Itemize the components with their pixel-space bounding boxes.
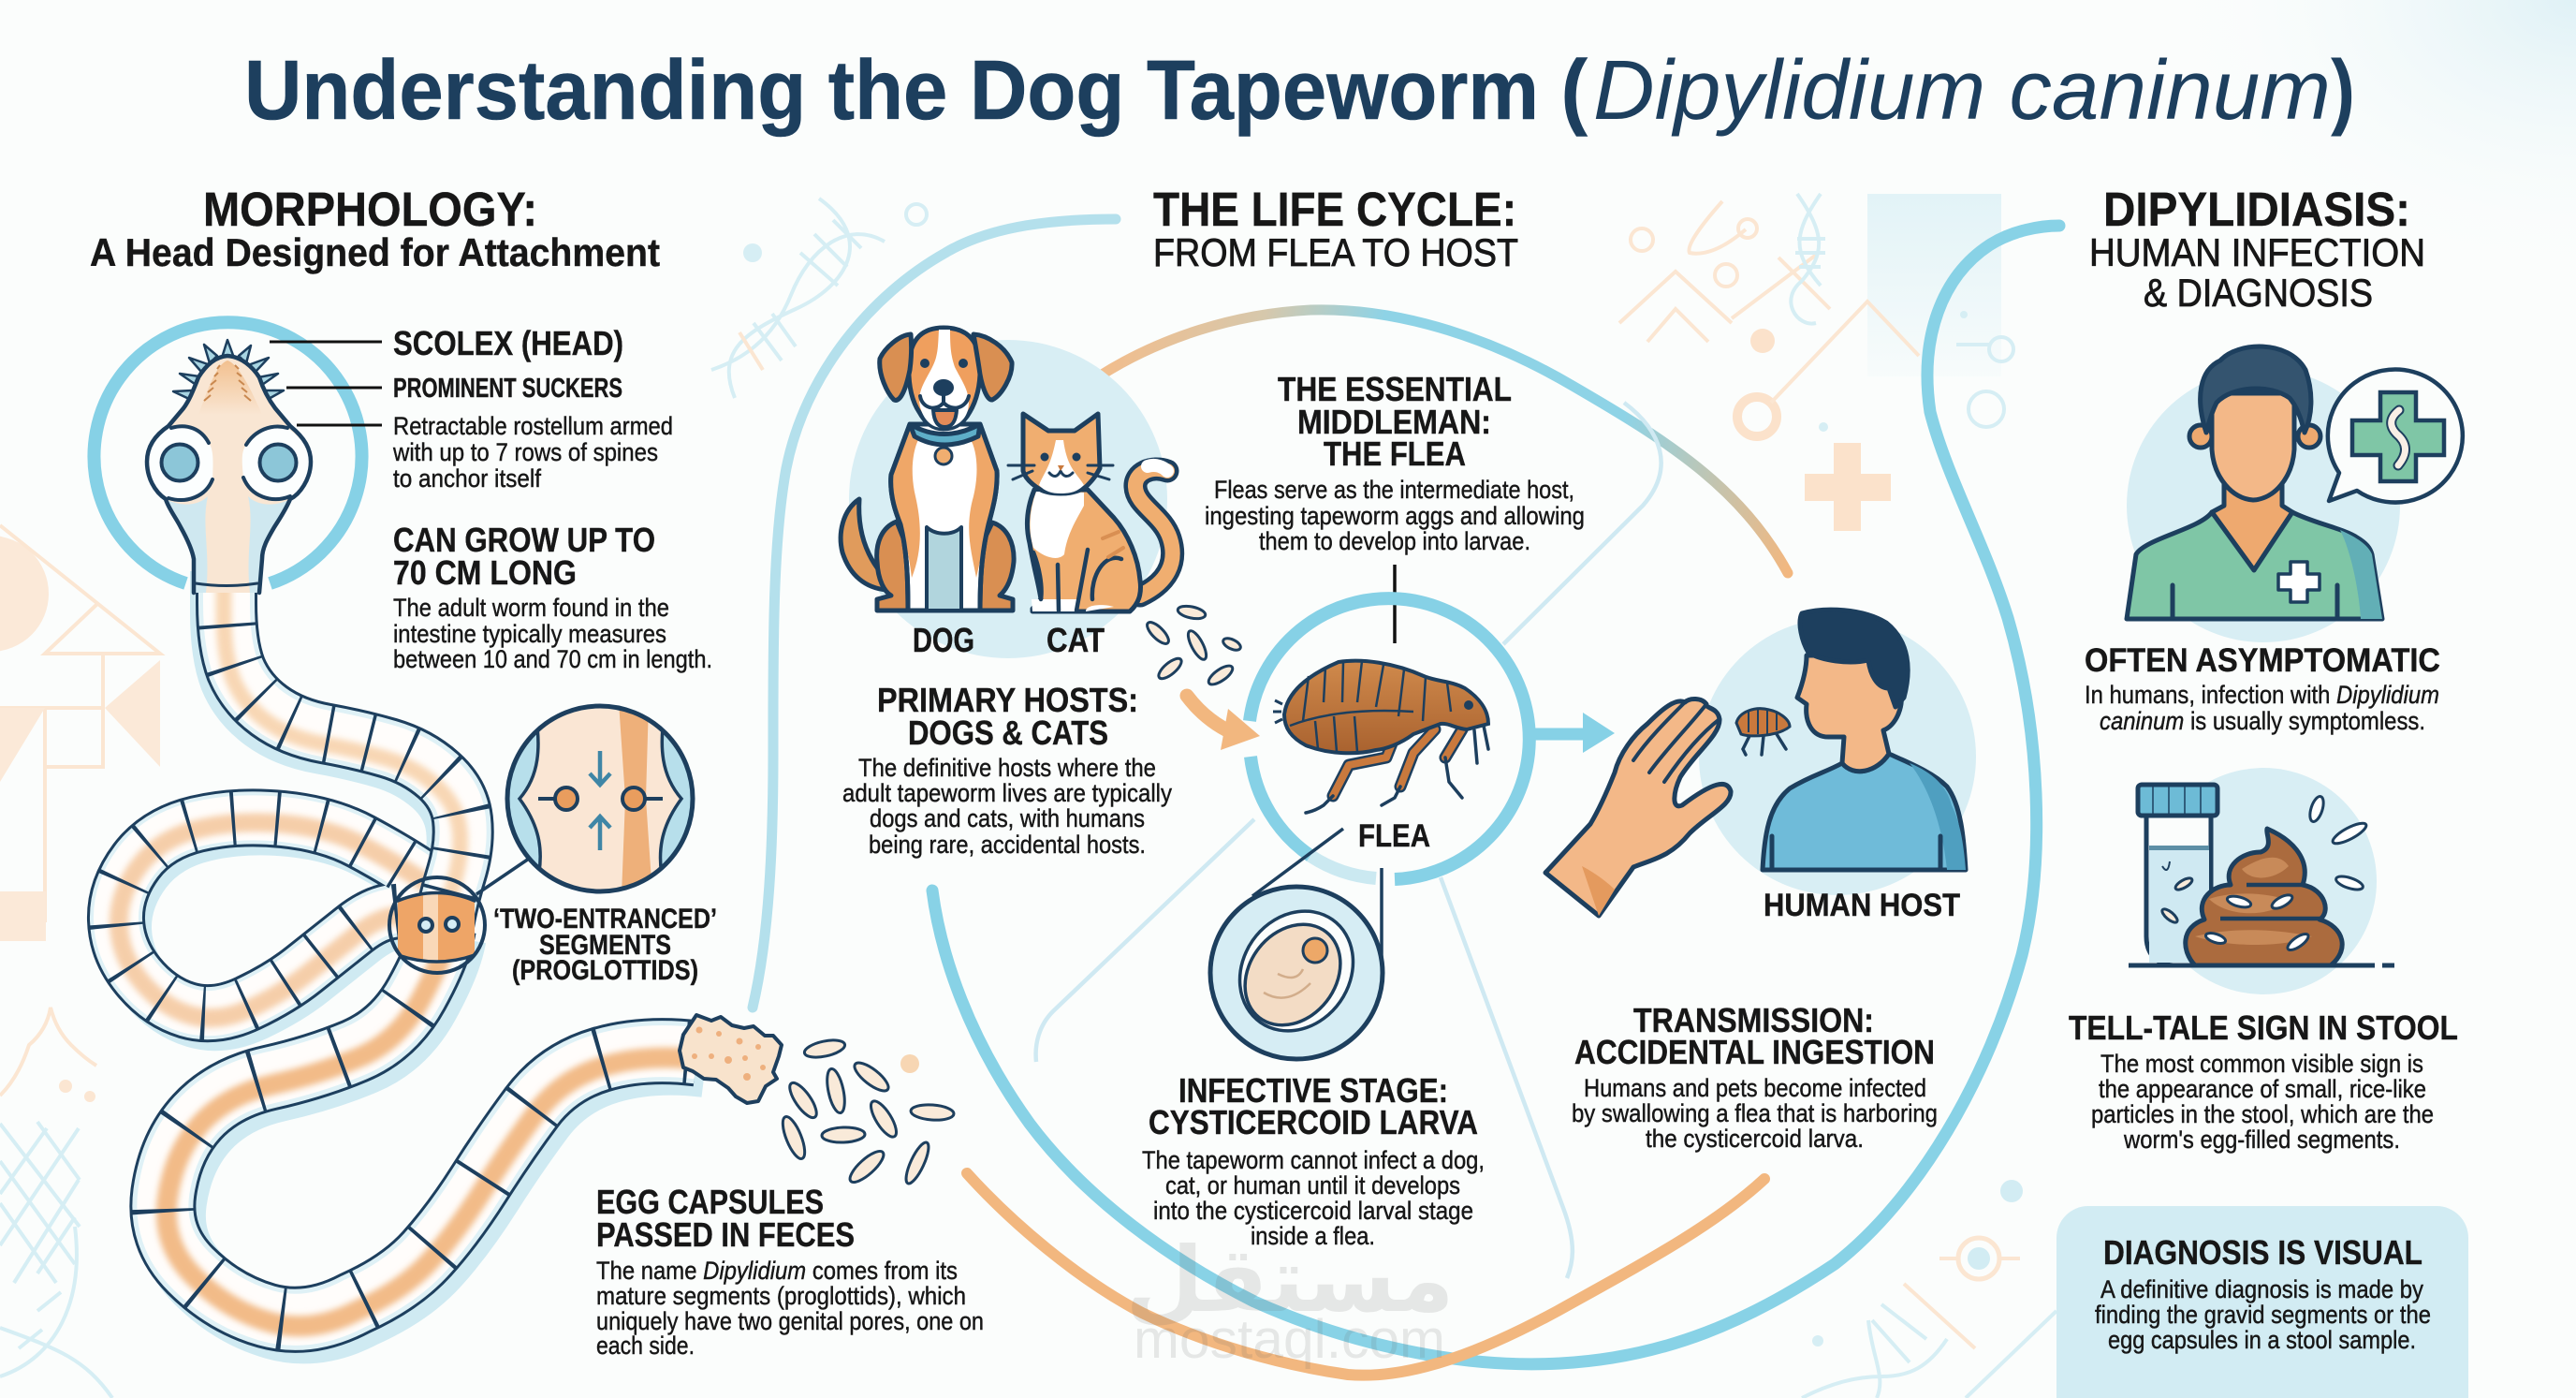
label: flea: FLEA <box>1358 818 1430 854</box>
label: human host: HUMAN HOST <box>1764 888 1960 923</box>
label: two-entranced segments: SEGMENTS <box>539 930 671 961</box>
text: primary hosts: dogs and cats, with humans <box>870 804 1145 832</box>
text: length of the worm <box>393 521 712 673</box>
icon: doctor <box>2127 346 2382 619</box>
callout: diagnosis is visual: finding the gravid segments or the <box>2095 1301 2431 1329</box>
dipylidiasis heading <box>2089 183 2425 315</box>
title <box>244 44 2355 138</box>
text: egg capsules <box>596 1183 984 1360</box>
label: prominent suckers: PROMINENT SUCKERS <box>393 374 622 404</box>
text: transmission: TRANSMISSION: <box>1633 1001 1874 1039</box>
spines <box>173 340 284 399</box>
icon: sample jar <box>2138 785 2217 965</box>
callout: diagnosis is visual: DIAGNOSIS IS VISUAL <box>2103 1233 2422 1272</box>
large magnifier: two genital pores <box>505 702 693 895</box>
life cycle top arc <box>1099 310 1788 573</box>
text: length of the worm: between 10 and 70 cm in length. <box>393 645 712 673</box>
text: tell-tale sign: particles in the stool, which are the <box>2091 1100 2434 1128</box>
callout: diagnosis is visual: A definitive diagnosis is made by <box>2100 1275 2423 1303</box>
label: scolex: SCOLEX (HEAD) <box>393 324 623 362</box>
text: tell-tale sign: the appearance of small, rice-like <box>2099 1075 2426 1103</box>
text: length of the worm: The adult worm found in the <box>393 594 669 622</box>
pale circle behind pets <box>849 340 1167 658</box>
label: retractable rostellum: to anchor itself <box>393 464 541 493</box>
icon: stool with segments <box>2129 795 2394 965</box>
arrow: flea to human <box>1531 713 1615 753</box>
icon: dog <box>841 328 1014 611</box>
morphology heading: MORPHOLOGY: <box>203 183 537 236</box>
callout: diagnosis is visual: egg capsules in a stool sample. <box>2108 1326 2416 1354</box>
label: retractable rostellum: Retractable rostellum armed <box>393 412 673 440</box>
panel: life cycle <box>841 183 1976 1250</box>
text: primary hosts: PRIMARY HOSTS: <box>877 681 1138 719</box>
flea highlight ring <box>1250 598 1530 879</box>
decorative background motifs <box>0 194 2056 1398</box>
life cycle outer guide arc <box>753 219 1116 1008</box>
text: essential middleman: them to develop into larvae. <box>1259 527 1530 555</box>
text: infective stage: inside a flea. <box>1251 1222 1375 1250</box>
icon: flea <box>1273 661 1488 813</box>
text: length of the worm: 70 CM LONG <box>393 553 577 592</box>
morphology heading <box>90 183 660 274</box>
text: tell-tale sign: worm's egg-filled segments. <box>2123 1126 2400 1154</box>
text: primary hosts: The definitive hosts where the <box>858 754 1156 782</box>
flea callout line <box>1393 565 1397 643</box>
cysticercoid larva magnifier <box>1210 887 1383 1059</box>
text: primary hosts: adult tapeworm lives are typically <box>842 779 1172 807</box>
life cycle heading: FROM FLEA TO HOST <box>1153 230 1518 274</box>
text: egg capsules: mature segments (proglottids), which <box>596 1282 966 1310</box>
life cycle orange arc <box>967 1173 1764 1376</box>
watermark: مستقل <box>1125 1228 1455 1332</box>
text: often asymptomatic: caninum is usually symptomless. <box>2100 707 2425 735</box>
title: Understanding the Dog Tapeworm ( <box>244 44 1588 138</box>
label: two-entranced segments: ‘TWO-ENTRANCED’ <box>493 904 717 934</box>
text: egg capsules: each side. <box>596 1332 695 1360</box>
morphology heading: A Head Designed for Attachment <box>90 230 660 274</box>
labels: dog and cat: CAT <box>1046 621 1105 659</box>
thin pale connector curves <box>1036 403 1661 1278</box>
label: retractable rostellum <box>392 412 673 493</box>
dipylidiasis heading: HUMAN INFECTION <box>2089 230 2425 274</box>
callout lines to larva <box>1252 829 1382 973</box>
scolex highlight ring <box>94 322 361 583</box>
text: often asymptomatic: OFTEN ASYMPTOMATIC <box>2085 642 2440 679</box>
callout: diagnosis is visual <box>2056 1206 2468 1398</box>
text: tell-tale sign: The most common visible sign is <box>2100 1050 2423 1078</box>
pale circle behind human <box>1699 618 1976 895</box>
text: primary hosts: being rare, accidental hosts. <box>869 831 1146 859</box>
magnifier connector line <box>476 859 529 894</box>
scolex callout lines <box>270 342 382 425</box>
life cycle heading: THE LIFE CYCLE: <box>1153 183 1516 236</box>
text: essential middleman: THE ESSENTIAL <box>1278 370 1512 408</box>
icon: hand reaching <box>1545 699 1731 916</box>
text: length of the worm: intestine typically measures <box>393 620 666 648</box>
life cycle heading <box>1153 183 1518 274</box>
text: egg capsules: uniquely have two genital pores, one on <box>596 1307 984 1335</box>
title: ) <box>2331 44 2355 138</box>
labels: dog and cat: DOG <box>913 621 974 659</box>
icon: small flea near hand <box>1736 709 1790 755</box>
text: infective stage: CYSTICERCOID LARVA <box>1149 1103 1478 1141</box>
panel: human infection and diagnosis <box>2056 183 2468 1398</box>
icon: speech bubble with cross and worm <box>2328 370 2463 503</box>
text: egg capsules: The name Dipylidium comes from its <box>596 1257 958 1285</box>
text: essential middleman: Fleas serve as the intermediate host, <box>1214 476 1574 504</box>
watermark: mostaql.com <box>1134 1309 1445 1370</box>
arrow: eggs into flea <box>1187 696 1260 750</box>
label: two-entranced segments: (PROGLOTTIDS) <box>512 955 698 986</box>
text: often asymptomatic: In humans, infection with Dipylidium <box>2085 681 2439 709</box>
egg capsules to flea <box>1144 604 1242 688</box>
text: transmission <box>1572 1001 1938 1153</box>
text: infective stage: cat, or human until it develops <box>1165 1171 1460 1199</box>
life cycle main blue arc <box>932 226 2059 1364</box>
text: transmission: by swallowing a flea that is harboring <box>1572 1099 1938 1127</box>
pale circle behind stool <box>2150 768 2377 994</box>
icon: human host <box>1763 610 1966 870</box>
text: infective stage: into the cysticercoid larval stage <box>1153 1197 1473 1225</box>
text: essential middleman: MIDDLEMAN: <box>1297 403 1491 441</box>
text: transmission: Humans and pets become infected <box>1584 1074 1926 1102</box>
text: infective stage: The tapeworm cannot infect a dog, <box>1142 1146 1485 1174</box>
text: transmission: ACCIDENTAL INGESTION <box>1574 1033 1935 1071</box>
text: infective stage <box>1142 1071 1485 1250</box>
tapeworm body <box>116 562 706 1329</box>
labels: dog and cat <box>913 621 1105 659</box>
worm tail fragment <box>680 1015 782 1103</box>
text: transmission: the cysticercoid larva. <box>1646 1125 1864 1153</box>
label: retractable rostellum: with up to 7 rows of spines <box>392 438 658 466</box>
text: egg capsules: EGG CAPSULES <box>596 1183 824 1221</box>
panel: morphology <box>90 183 984 1360</box>
egg capsules released <box>779 1037 955 1186</box>
title: Dipylidium caninum <box>1593 44 2331 138</box>
text: tell-tale sign <box>2069 1008 2458 1154</box>
text: egg capsules: PASSED IN FECES <box>596 1215 855 1254</box>
dipylidiasis heading: & DIAGNOSIS <box>2144 271 2373 315</box>
dipylidiasis heading: DIPYLIDIASIS: <box>2103 183 2410 236</box>
pale circle behind doctor <box>2127 369 2400 642</box>
text: tell-tale sign: TELL-TALE SIGN IN STOOL <box>2069 1008 2458 1047</box>
text: infective stage: INFECTIVE STAGE: <box>1178 1071 1448 1110</box>
small magnifier on segment <box>389 877 485 973</box>
text: primary hosts: DOGS & CATS <box>908 714 1108 752</box>
text: essential middleman: THE FLEA <box>1324 434 1466 473</box>
label: two-entranced segments <box>493 904 717 986</box>
text: length of the worm: CAN GROW UP TO <box>393 521 655 559</box>
text: often asymptomatic <box>2085 642 2440 735</box>
text: essential middleman <box>1205 370 1585 555</box>
text: primary hosts <box>842 681 1172 859</box>
text: essential middleman: ingesting tapeworm aggs and allowing <box>1205 502 1585 530</box>
icon: cat <box>1008 414 1173 611</box>
scolex head with suckers and spines <box>147 340 311 593</box>
